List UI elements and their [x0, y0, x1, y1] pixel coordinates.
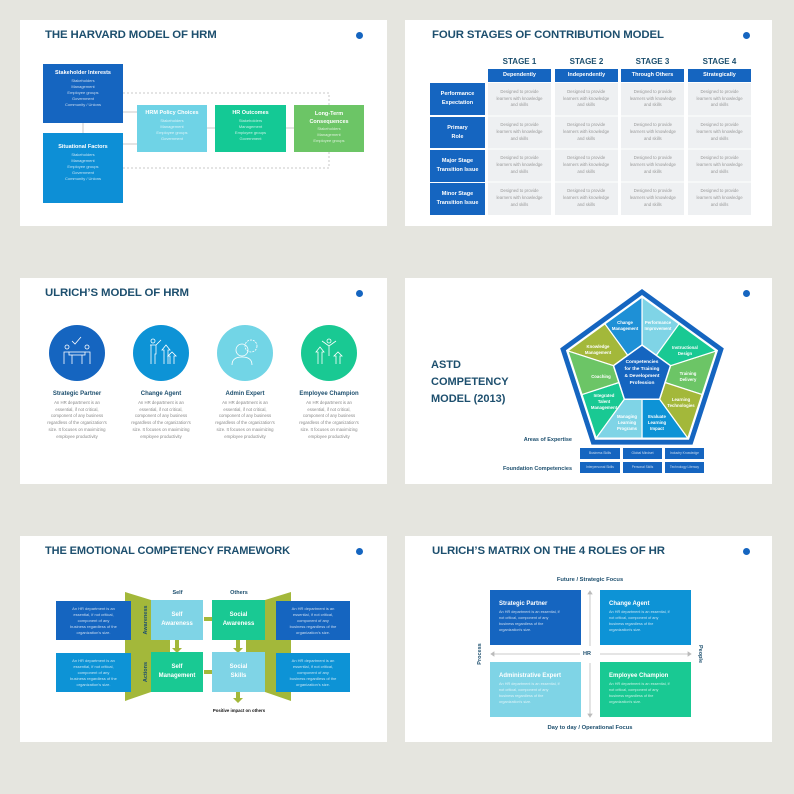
box: situational factors: Community / Unions: [65, 176, 101, 181]
box: long-term consequences: [294, 105, 364, 152]
table body: Designed to provide: [567, 155, 605, 160]
table body: [430, 83, 751, 215]
left text boxes: business regardless of the: [70, 624, 117, 629]
table body: Designed to provide: [567, 122, 605, 127]
box: HRM policy choices: HRM Policy Choices: [145, 110, 199, 116]
box: stakeholder interests: Government: [72, 96, 94, 101]
icon: strategic partner: [49, 325, 105, 381]
box: social skills: [212, 652, 265, 692]
table body: and skills: [511, 169, 528, 174]
text: admin expert: essential, if not critical,: [223, 407, 267, 412]
table body: learners with knowledge: [696, 195, 743, 200]
table body: and skills: [711, 202, 728, 207]
pentagon chart: Change: [617, 320, 633, 325]
table body: and skills: [644, 136, 662, 141]
text: strategic partner: size. It focuses on maximizing: [48, 427, 106, 432]
caption: Positive impact on others: [213, 708, 265, 713]
table body: learners with knowledge: [563, 195, 609, 200]
icon: change agent: [133, 325, 189, 381]
text: strategic partner: component of any business: [51, 413, 103, 418]
panel: emotional competency framework: An HR department is an: [292, 658, 334, 663]
table body: learners with knowledge: [630, 129, 676, 134]
text: admin expert: [215, 390, 275, 439]
table body: Designed to provide: [500, 89, 539, 94]
table body: learners with knowledge: [696, 129, 743, 134]
panel: ASTD model: [405, 278, 772, 484]
table body: learners with knowledge: [696, 96, 743, 101]
box: long-term consequences: Management: [317, 132, 341, 137]
text: change agent: component of any business: [135, 413, 187, 418]
quadrant: administrative expert: organization's size.: [499, 700, 531, 704]
box: long-term consequences: Employee groups: [313, 138, 345, 143]
panel: ulrich matrix: [405, 536, 772, 742]
quadrant: strategic partner: not critical, component of any: [499, 616, 548, 620]
panel: emotional competency framework: business regardless of the: [70, 676, 117, 681]
box: HRM policy choices: [137, 105, 207, 152]
quadrant: administrative expert: business regardless of the: [499, 694, 543, 698]
table body: learners with knowledge: [630, 195, 676, 200]
text: strategic partner: essential, if not critical,: [55, 407, 99, 412]
pentagon chart: Instructional: [672, 345, 698, 350]
text: employee champion: size. It focuses on maximizing: [300, 427, 358, 432]
quadrant: strategic partner: business regardless of the: [499, 622, 543, 626]
label: foundation competencies: Foundation Competencies: [503, 466, 572, 472]
table body: Designed to provide: [700, 155, 739, 160]
quadrant: strategic partner: Strategic Partner: [499, 601, 547, 607]
pentagon chart: Programs: [617, 426, 638, 431]
table body: Designed to provide: [500, 188, 539, 193]
page number: [743, 548, 750, 555]
panel: emotional competency framework: essential, if not critical,: [293, 664, 333, 669]
stage headers: [488, 57, 751, 82]
panel: emotional competency framework: essential, if not critical,: [73, 664, 114, 669]
table body: and skills: [577, 102, 595, 107]
stage headers: STAGE 1: [503, 57, 536, 66]
quadrant: change agent: organization's size.: [609, 628, 641, 632]
table body: and skills: [511, 136, 528, 141]
text: change agent: regardless of the organization's: [131, 420, 191, 425]
box: HRM policy choices: Employee groups: [156, 130, 188, 135]
left text boxes: component of any: [78, 618, 109, 623]
text: employee champion: regardless of the organization's: [299, 420, 359, 425]
stage headers: Independently: [568, 72, 605, 78]
pentagon chart: Evaluate: [648, 414, 666, 419]
foundation boxes: Interpersonal Skills: [586, 465, 614, 469]
pentagon chart: Coaching: [591, 374, 611, 379]
pentagon chart: Management: [585, 350, 612, 355]
box: self management: Management: [159, 673, 195, 679]
table body: learners with knowledge: [496, 195, 543, 200]
panel: emotional competency framework: component of any: [297, 670, 329, 675]
table body: and skills: [711, 169, 728, 174]
table body: Designed to provide: [634, 89, 672, 94]
stage headers: STAGE 2: [570, 57, 603, 66]
axis labels: Future / Strategic Focus: [557, 577, 623, 583]
box: stakeholder interests: Management: [71, 84, 95, 89]
icon: admin expert: [217, 325, 273, 381]
labels: self / others: Self: [172, 590, 183, 596]
box: self awareness: [151, 600, 203, 640]
quadrant: change agent: Change Agent: [609, 601, 649, 607]
table body: learners with knowledge: [496, 96, 543, 101]
quadrant: administrative expert: [490, 662, 581, 717]
table body: learners with knowledge: [563, 129, 609, 134]
quadrant: employee champion: An HR department is an essential, if: [609, 682, 670, 686]
text: admin expert: size. It focuses on maximizing: [216, 427, 274, 432]
label: areas of expertise: Areas of Expertise: [524, 437, 572, 443]
box: social awareness: [212, 600, 265, 640]
pentagon chart: Competencies: [626, 359, 659, 365]
title: ASTD: [431, 359, 461, 371]
box: HR outcomes: HR Outcomes: [232, 110, 269, 116]
box: self management: [151, 652, 203, 692]
foundation boxes: Global Mindset: [632, 451, 654, 455]
text: change agent: size. It focuses on maximizing: [132, 427, 190, 432]
pentagon chart: Learning: [618, 420, 636, 425]
table body: Transition Issue: [437, 167, 478, 173]
title: THE EMOTIONAL COMPETENCY FRAMEWORK: [45, 545, 290, 557]
pentagon chart: Impact: [650, 426, 664, 431]
quadrant: change agent: not critical, component of any: [609, 616, 658, 620]
panel: emotional competency framework: business regardless of the: [290, 676, 336, 681]
quadrant: strategic partner: organization's size.: [499, 628, 531, 632]
quadrant: strategic partner: [490, 590, 581, 645]
foundation boxes: Industry Knowledge: [670, 451, 699, 455]
box: situational factors: Management: [71, 158, 95, 163]
text: change agent: essential, if not critical,: [139, 407, 183, 412]
box: HRM policy choices: Government: [161, 136, 183, 141]
left text boxes: essential, if not critical,: [73, 612, 114, 617]
text: admin expert: component of any business: [219, 413, 271, 418]
foundation boxes: Technology Literacy: [670, 465, 699, 469]
pentagon chart: Learning: [648, 420, 666, 425]
panel: ulrich matrix: Day to day / Operational Focus: [547, 725, 633, 731]
connectors: [82, 92, 330, 168]
box: social awareness: Awareness: [223, 621, 254, 627]
text: admin expert: employee productivity: [224, 434, 266, 439]
olive frame: [125, 592, 291, 703]
right text boxes: essential, if not critical,: [293, 612, 333, 617]
table body: and skills: [644, 202, 662, 207]
text: employee champion: essential, if not critical,: [307, 407, 351, 412]
table body: Designed to provide: [700, 122, 739, 127]
page number: [356, 32, 363, 39]
panel: harvard model: [20, 20, 387, 226]
foundation boxes: [580, 448, 704, 473]
box: long-term consequences: Consequences: [309, 119, 349, 125]
table body: Designed to provide: [567, 89, 605, 94]
title: FOUR STAGES OF CONTRIBUTION MODEL: [432, 29, 664, 41]
table body: learners with knowledge: [496, 162, 543, 167]
table body: and skills: [577, 202, 595, 207]
text: strategic partner: employee productivity: [56, 434, 98, 439]
quadrant: administrative expert: not critical, component of any: [499, 688, 548, 692]
table body: learners with knowledge: [563, 96, 609, 101]
table body: and skills: [644, 169, 662, 174]
text: strategic partner: [47, 390, 107, 439]
table body: Role: [452, 134, 463, 140]
panel: emotional competency framework: component of any: [78, 670, 109, 675]
table body: learners with knowledge: [630, 96, 676, 101]
box: situational factors: Employee groups: [67, 164, 99, 169]
arrows: [204, 614, 217, 624]
olive frame: Awareness: [143, 606, 149, 634]
icon: employee champion: [301, 325, 357, 381]
pentagon chart: for the Training: [625, 366, 660, 372]
box: HR outcomes: Government: [239, 136, 262, 141]
text: change agent: An HR department is an: [138, 400, 184, 405]
box: stakeholder interests: Employee groups: [67, 90, 99, 95]
quadrant: administrative expert: Administrative Expert: [499, 673, 561, 679]
text: admin expert: regardless of the organization's: [215, 420, 275, 425]
box: situational factors: Government: [72, 170, 94, 175]
table body: and skills: [577, 136, 595, 141]
table body: Primary: [447, 124, 468, 130]
table body: learners with knowledge: [563, 162, 609, 167]
icons circles: [49, 325, 357, 381]
quadrant: employee champion: not critical, component of any: [609, 688, 658, 692]
text: change agent: Change Agent: [141, 391, 181, 397]
pentagon chart: Management: [591, 405, 618, 410]
box: situational factors: Situational Factors: [58, 144, 108, 150]
table body: and skills: [711, 136, 728, 141]
panel: ulrich matrix: People: [697, 645, 703, 663]
text: strategic partner: An HR department is an: [54, 400, 100, 405]
box: social awareness: Social: [230, 612, 247, 618]
box: stakeholder interests: Stakeholder Interests: [55, 70, 111, 76]
panel: four stages: [405, 20, 772, 226]
quadrant: administrative expert: An HR department is an essential, if: [499, 682, 560, 686]
text: employee champion: employee productivity: [308, 434, 350, 439]
quadrant: employee champion: business regardless of the: [609, 694, 653, 698]
pentagon chart: Technologies: [667, 403, 695, 408]
pentagon chart: Knowledge: [587, 344, 610, 349]
box: social skills: Social: [230, 664, 247, 670]
table body: learners with knowledge: [496, 129, 543, 134]
right text boxes: An HR department is an: [292, 606, 334, 611]
box: stakeholder interests: Community / Unions: [65, 102, 101, 107]
title: THE HARVARD MODEL OF HRM: [45, 29, 217, 41]
table body: Designed to provide: [500, 122, 539, 127]
table body: Designed to provide: [634, 188, 672, 193]
foundation boxes: Personal Skills: [632, 465, 653, 469]
panel: emotional competency framework: Others: [230, 590, 248, 596]
table body: Designed to provide: [700, 188, 739, 193]
right text boxes: component of any: [297, 618, 329, 623]
table body: and skills: [711, 102, 728, 107]
title: [431, 359, 509, 405]
box: self awareness: Awareness: [161, 621, 193, 627]
panel: ulrich model: [20, 278, 387, 484]
box: self awareness: Self: [171, 612, 182, 618]
stage headers: Dependently: [503, 72, 536, 78]
table body: and skills: [511, 202, 528, 207]
quadrant: employee champion: [600, 662, 691, 717]
box: HR outcomes: Stakeholders: [239, 118, 262, 123]
text: change agent: employee productivity: [140, 434, 182, 439]
panel: emotional competency framework: [20, 536, 387, 742]
table body: Transition Issue: [437, 200, 478, 206]
pentagon chart: Integrated: [594, 393, 615, 398]
text: employee champion: component of any business: [303, 413, 355, 418]
left text boxes: [56, 601, 131, 640]
pentagon chart: Delivery: [680, 377, 697, 382]
box: situational factors: Stakeholders: [71, 152, 95, 157]
page number: [356, 290, 363, 297]
table body: learners with knowledge: [630, 162, 676, 167]
text: employee champion: [299, 390, 359, 439]
box: HR outcomes: Management: [239, 124, 262, 129]
table body: Major Stage: [442, 158, 473, 164]
pentagon chart: Improvement: [645, 326, 672, 331]
text: strategic partner: Strategic Partner: [53, 391, 101, 397]
table body: learners with knowledge: [696, 162, 743, 167]
box: HRM policy choices: Stakeholders: [160, 118, 184, 123]
panel: ulrich matrix: HR: [583, 651, 591, 657]
box: long-term consequences: Long-Term: [315, 111, 343, 117]
text: employee champion: An HR department is an: [306, 400, 352, 405]
panel: emotional competency framework: organization's size.: [296, 682, 330, 687]
olive frame: Actions: [143, 662, 149, 682]
stage headers: STAGE 3: [636, 57, 669, 66]
panel: emotional competency framework: organization's size.: [77, 682, 110, 687]
axes: [490, 590, 692, 718]
stage headers: Strategically: [703, 72, 736, 78]
right text boxes: [276, 601, 350, 640]
box: situational factors: [43, 133, 123, 203]
box: self management: Self: [171, 664, 182, 670]
text: admin expert: Admin Expert: [225, 391, 264, 397]
box: stakeholder interests: Stakeholders: [71, 78, 95, 83]
pentagon chart: Learning: [672, 397, 690, 402]
left text boxes: organization's size.: [77, 630, 110, 635]
title: COMPETENCY: [431, 376, 509, 388]
left text boxes: An HR department is an: [72, 606, 115, 611]
pentagon chart: & Development: [625, 373, 660, 379]
title: ULRICH’S MODEL OF HRM: [45, 287, 189, 299]
quadrant: employee champion: Employee Champion: [609, 673, 668, 679]
pentagon chart: Performance: [645, 320, 672, 325]
quadrant: strategic partner: An HR department is an essential, if: [499, 610, 560, 614]
pentagon chart: Managing: [617, 414, 637, 419]
table body: Expectation: [442, 100, 473, 106]
box: HRM policy choices: Management: [160, 124, 184, 129]
table body: Minor Stage: [442, 191, 473, 197]
quadrant: change agent: business regardless of the: [609, 622, 653, 626]
text: strategic partner: regardless of the organization's: [47, 420, 107, 425]
pentagon chart: Profession: [630, 380, 654, 386]
box: HR outcomes: Employee groups: [235, 130, 266, 135]
text: employee champion: Employee Champion: [299, 391, 359, 397]
pentagon chart: Design: [678, 351, 693, 356]
quadrant: change agent: [600, 590, 691, 645]
stage headers: STAGE 4: [703, 57, 736, 66]
table body: Designed to provide: [500, 155, 539, 160]
table body: Performance: [441, 91, 474, 97]
page number: [743, 290, 750, 297]
text: admin expert: An HR department is an: [222, 400, 268, 405]
panel: emotional competency framework: An HR department is an: [72, 658, 115, 663]
table body: and skills: [577, 169, 595, 174]
pentagon chart: Training: [680, 371, 697, 376]
box: long-term consequences: Stakeholders: [317, 126, 341, 131]
right text boxes: business regardless of the: [290, 624, 336, 629]
table body: and skills: [511, 102, 528, 107]
panel: ulrich matrix: Process: [477, 643, 483, 665]
foundation boxes: Business Skills: [589, 451, 611, 455]
pentagon chart: [560, 289, 724, 445]
stage headers: Through Others: [632, 72, 673, 78]
right text boxes: organization's size.: [296, 630, 330, 635]
table body: Designed to provide: [567, 188, 605, 193]
page number: [743, 32, 750, 39]
box: stakeholder interests: [43, 64, 123, 123]
table body: Designed to provide: [634, 122, 672, 127]
pentagon chart: Talent: [598, 399, 611, 404]
pentagon chart: Management: [612, 326, 639, 331]
text: change agent: [131, 390, 191, 439]
table body: and skills: [644, 102, 662, 107]
box: social skills: Skills: [231, 673, 246, 679]
table body: Designed to provide: [700, 89, 739, 94]
title: ULRICH’S MATRIX ON THE 4 ROLES OF HR: [432, 545, 665, 557]
quadrant: employee champion: organization's size.: [609, 700, 641, 704]
page number: [356, 548, 363, 555]
box: HR outcomes: [215, 105, 286, 152]
title: MODEL (2013): [431, 393, 505, 405]
quadrant: change agent: An HR department is an essential, if: [609, 610, 670, 614]
table body: Designed to provide: [634, 155, 672, 160]
